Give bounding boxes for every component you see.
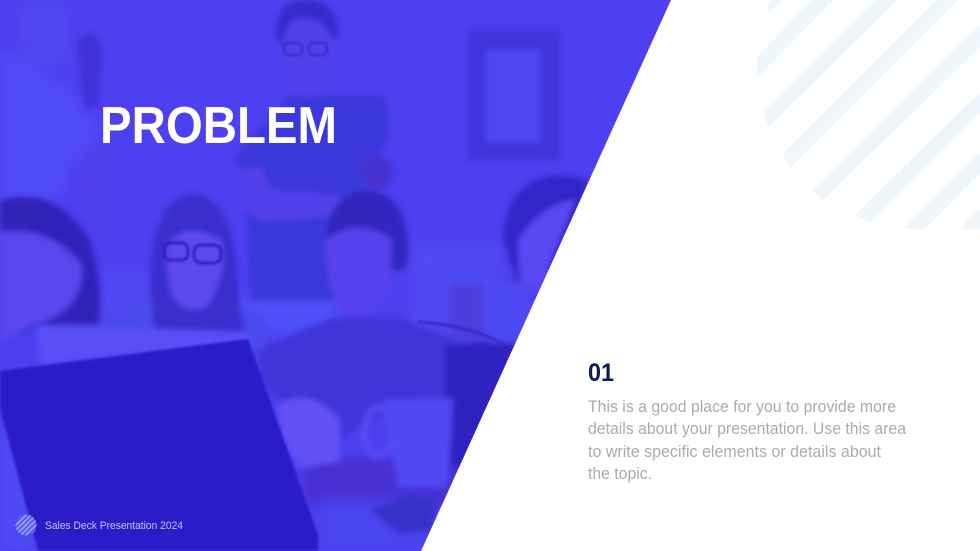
sweater — [258, 318, 470, 440]
left woman — [0, 197, 100, 340]
laptop — [0, 339, 318, 551]
description text: details about your presentation. Use this area — [588, 419, 907, 438]
bun woman — [360, 155, 394, 189]
description text: to write specific elements or details about — [588, 442, 881, 461]
phone — [370, 494, 437, 534]
description text: the topic. — [588, 464, 652, 483]
glasses centre man — [284, 43, 327, 55]
description text: This is a good place for you to provide more — [588, 397, 896, 416]
centre man arms — [240, 165, 348, 222]
glasses middle woman — [164, 243, 221, 263]
chair back — [418, 322, 505, 345]
decorative stripes — [757, 0, 980, 229]
books — [450, 284, 483, 341]
table — [303, 458, 463, 506]
centre man shirt — [233, 95, 390, 300]
right woman — [503, 175, 590, 290]
striped top — [116, 311, 268, 349]
title: PROBLEM — [100, 97, 337, 155]
tinted team photo panel — [0, 0, 680, 551]
bottom left light — [6, 438, 30, 545]
footer text: Sales Deck Presentation 2024 — [45, 520, 183, 532]
cup — [383, 398, 453, 488]
left man — [2, 56, 94, 197]
picture frame — [468, 30, 560, 160]
cup handle — [364, 408, 392, 456]
description text — [588, 397, 907, 483]
sofa light behind — [105, 276, 145, 316]
centre man head — [286, 20, 332, 65]
laptop rim — [37, 325, 250, 365]
middle woman — [150, 194, 246, 335]
footer logo icon — [16, 514, 36, 536]
section number: 01 — [588, 359, 614, 387]
chair and dark right — [444, 339, 516, 469]
hand — [277, 398, 340, 468]
wall ornament — [78, 32, 102, 110]
